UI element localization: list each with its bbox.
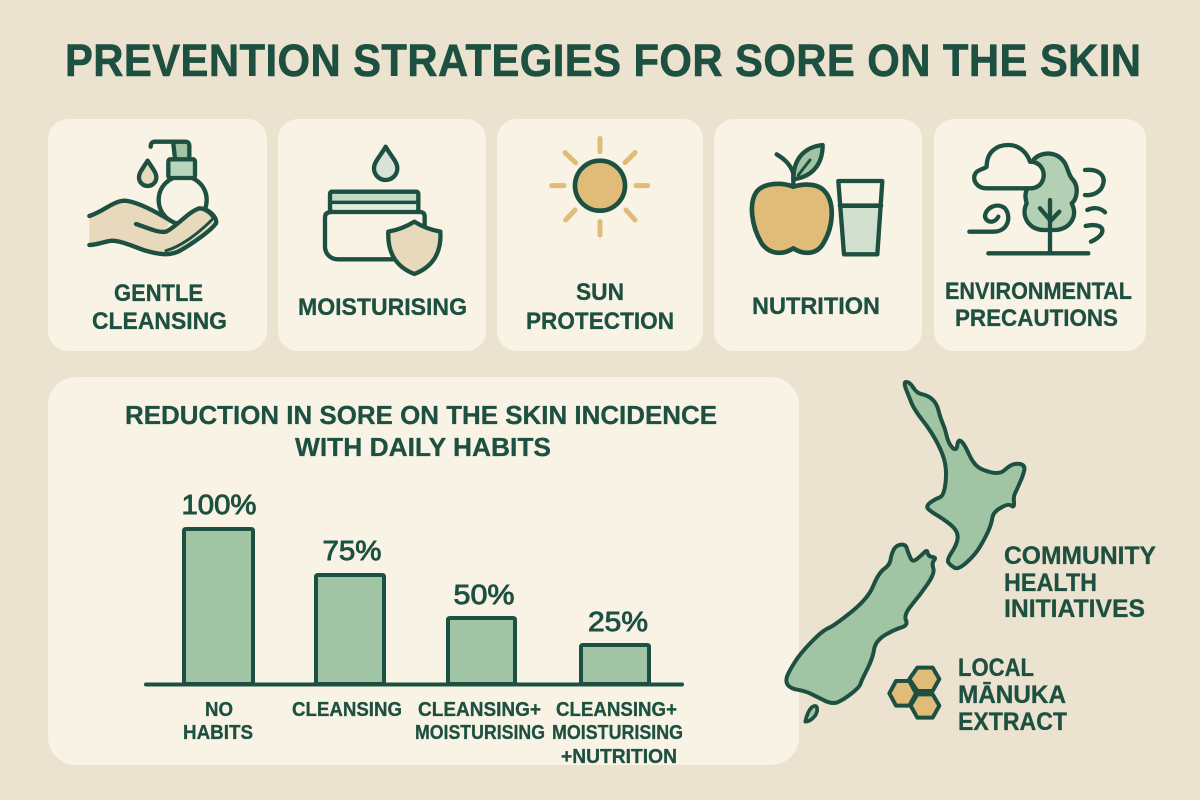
bar: no habits 100%	[182, 489, 256, 684]
chart heading	[125, 400, 717, 462]
label: gentle cleansing: CLEANSING	[92, 308, 227, 335]
map: South Island	[786, 545, 935, 703]
bar: cleansing + moisturising + nutrition 25%: 25%	[588, 606, 648, 637]
icon: apple and glass of water	[752, 145, 882, 254]
label: sun protection: PROTECTION	[526, 308, 674, 335]
label: local manuka extract: EXTRACT	[958, 708, 1067, 736]
icon: sun	[552, 138, 648, 235]
label: sun protection: SUN	[576, 279, 624, 306]
chart axis	[146, 682, 682, 686]
category label: no habits: HABITS	[183, 722, 253, 744]
category label: cleansing + moisturising: MOISTURISING	[415, 722, 545, 744]
icon: honeycomb	[889, 668, 939, 718]
chart heading: WITH DAILY HABITS	[295, 432, 551, 462]
category label: cleansing + moisturising + nutrition: +NUTRITION	[561, 746, 677, 768]
bar: cleansing + moisturising + nutrition 25%	[581, 606, 649, 684]
bar: cleansing 75%	[316, 535, 384, 684]
category label: cleansing + moisturising + nutrition	[552, 699, 683, 768]
label: community health initiatives: COMMUNITY	[1004, 542, 1156, 570]
category label: cleansing + moisturising + nutrition: CLEANSING+	[556, 699, 677, 721]
icon: cream jar with shield	[325, 147, 440, 274]
panel: moisturising	[278, 119, 486, 351]
category label: cleansing + moisturising: CLEANSING+	[418, 699, 541, 721]
label: gentle cleansing: GENTLE	[114, 280, 203, 307]
label: local manuka extract: LOCAL	[958, 654, 1034, 682]
icon: cloud, tree and wind	[969, 145, 1105, 253]
bar: cleansing 75%: 75%	[322, 535, 382, 566]
label: local manuka extract	[958, 654, 1067, 736]
label: moisturising: MOISTURISING	[298, 294, 467, 321]
panel: environmental precautions	[934, 119, 1146, 351]
category label: cleansing + moisturising + nutrition: MOISTURISING	[552, 722, 683, 744]
map: North Island	[905, 382, 1024, 568]
category label: no habits: NO	[205, 699, 233, 721]
label: community health initiatives: HEALTH	[1004, 569, 1097, 597]
panel: gentle cleansing	[48, 119, 267, 351]
label: environmental precautions	[945, 278, 1132, 332]
panel: bar chart	[48, 377, 799, 768]
label: sun protection	[526, 279, 674, 335]
category label: no habits	[183, 699, 253, 744]
panel: sun protection	[497, 119, 703, 351]
icon: soap pump and hand	[89, 142, 216, 254]
label: community health initiatives	[1004, 542, 1156, 623]
title: PREVENTION STRATEGIES FOR SORE ON THE SKIN	[65, 37, 1141, 86]
label: local manuka extract: MĀNUKA	[958, 681, 1066, 709]
bar: cleansing + moisturising 50%: 50%	[454, 579, 514, 610]
category label: cleansing + moisturising	[415, 699, 545, 744]
label: gentle cleansing	[92, 280, 227, 335]
map: Stewart Island	[805, 706, 817, 722]
bar: cleansing + moisturising 50%	[448, 579, 515, 684]
label: community health initiatives: INITIATIVES	[1004, 595, 1145, 623]
map: New Zealand	[786, 382, 1024, 722]
label: nutrition: NUTRITION	[752, 293, 880, 320]
label: environmental precautions: ENVIRONMENTAL	[945, 278, 1132, 305]
bar: no habits 100%: 100%	[182, 489, 256, 520]
chart heading: REDUCTION IN SORE ON THE SKIN INCIDENCE	[125, 400, 717, 430]
label: environmental precautions: PRECAUTIONS	[955, 305, 1118, 332]
panel: nutrition	[714, 119, 922, 351]
category label: cleansing: CLEANSING	[292, 699, 402, 721]
